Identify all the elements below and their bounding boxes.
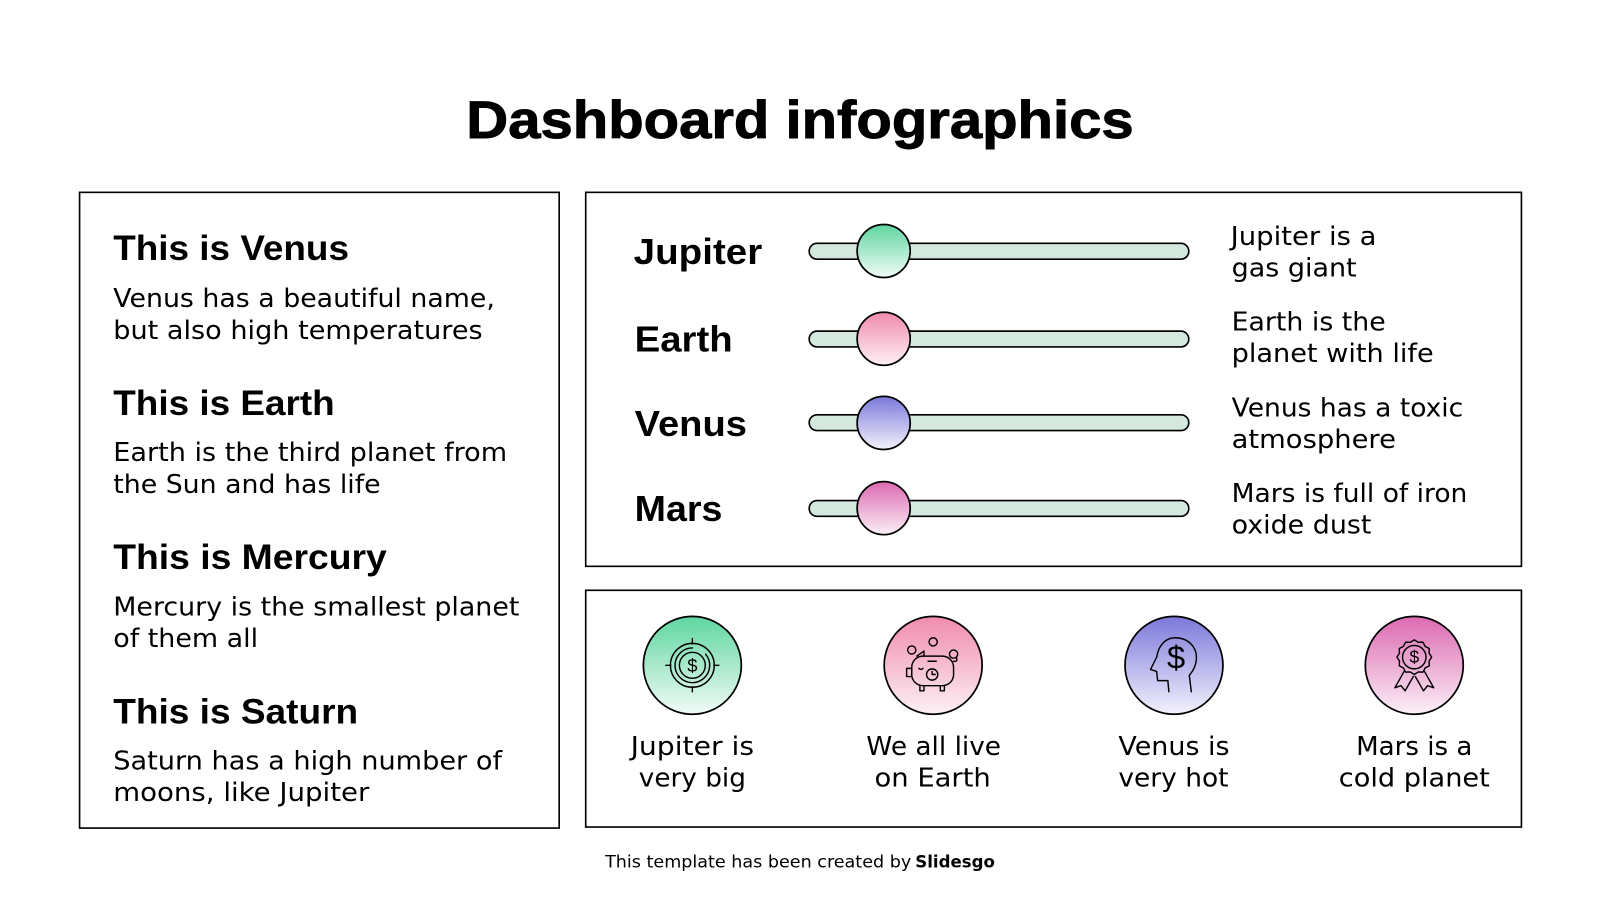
slider row: Venus <box>635 393 1463 455</box>
icon: piggy bank <box>907 638 958 691</box>
card: Earth: We all live <box>866 732 1001 762</box>
icon: rosette with dollar <box>1395 640 1434 691</box>
title: Dashboard infographics <box>466 91 1134 150</box>
text block: Venus <box>113 284 495 346</box>
text block: Earth: Earth is the third planet from <box>113 438 507 468</box>
text block: Saturn: Saturn has a high number of <box>113 746 503 776</box>
icon: target with dollar <box>666 639 719 692</box>
icon: rosette with dollar: $ <box>1409 647 1419 667</box>
card: Mars: cold planet <box>1339 764 1490 794</box>
heading: Earth: This is Earth <box>113 384 335 423</box>
slider row: Earth: planet with life <box>1232 339 1434 369</box>
text block: Mercury: of them all <box>113 624 258 654</box>
card: Venus <box>1118 616 1230 794</box>
heading: Mercury: This is Mercury <box>113 538 387 577</box>
slider row: Earth: Earth is the <box>1232 308 1386 338</box>
slider row: Jupiter <box>634 222 1377 284</box>
slider row: Venus: Venus has a toxic <box>1232 393 1463 423</box>
heading: Venus: This is Venus <box>113 229 349 268</box>
text block: Earth <box>113 438 507 500</box>
card: Earth <box>866 616 1001 794</box>
text block: Venus: Venus has a beautiful name, <box>113 284 495 314</box>
panel: planet descriptions <box>80 192 559 828</box>
heading: Saturn: This is Saturn <box>113 692 358 731</box>
slider row: Mars: Mars is full of iron <box>1232 479 1467 509</box>
card: Jupiter <box>628 616 754 794</box>
footer credit: This template has been created by <box>604 851 911 871</box>
card: Jupiter: Jupiter is <box>628 732 754 762</box>
slider row: Earth: Earth <box>635 319 733 360</box>
text block: Mercury: Mercury is the smallest planet <box>113 592 519 622</box>
card: Jupiter: very big <box>639 764 746 794</box>
text block: Earth: the Sun and has life <box>113 470 381 500</box>
slider row: Jupiter: Jupiter is a <box>1228 222 1377 252</box>
slider row: Mars <box>635 479 1467 541</box>
slider row: Mars: Mars <box>635 488 722 529</box>
panel: icon cards <box>586 590 1521 827</box>
icon: head with dollar <box>1151 638 1196 692</box>
slider row: Earth <box>635 308 1434 369</box>
slider row: Jupiter: Jupiter <box>634 231 762 272</box>
slider row: Venus: Venus <box>635 403 747 444</box>
card: Mars: Mars is a <box>1356 732 1472 762</box>
text block: Mercury <box>113 592 519 654</box>
card: Venus: very hot <box>1118 764 1229 794</box>
card: Earth: on Earth <box>874 764 991 794</box>
icon: target with dollar: $ <box>687 655 697 676</box>
slider row: Jupiter: gas giant <box>1232 254 1357 284</box>
slider row: Venus: atmosphere <box>1232 425 1396 455</box>
icon: head with dollar: $ <box>1167 638 1185 675</box>
card: Mars <box>1339 616 1490 794</box>
footer credit: Slidesgo <box>915 851 995 871</box>
panel: sliders <box>586 192 1521 566</box>
text block: Saturn: moons, like Jupiter <box>113 778 370 808</box>
text block: Saturn <box>113 746 503 808</box>
slider row: Mars: oxide dust <box>1232 511 1371 541</box>
text block: Venus: but also high temperatures <box>113 316 483 346</box>
card: Venus: Venus is <box>1118 732 1230 762</box>
